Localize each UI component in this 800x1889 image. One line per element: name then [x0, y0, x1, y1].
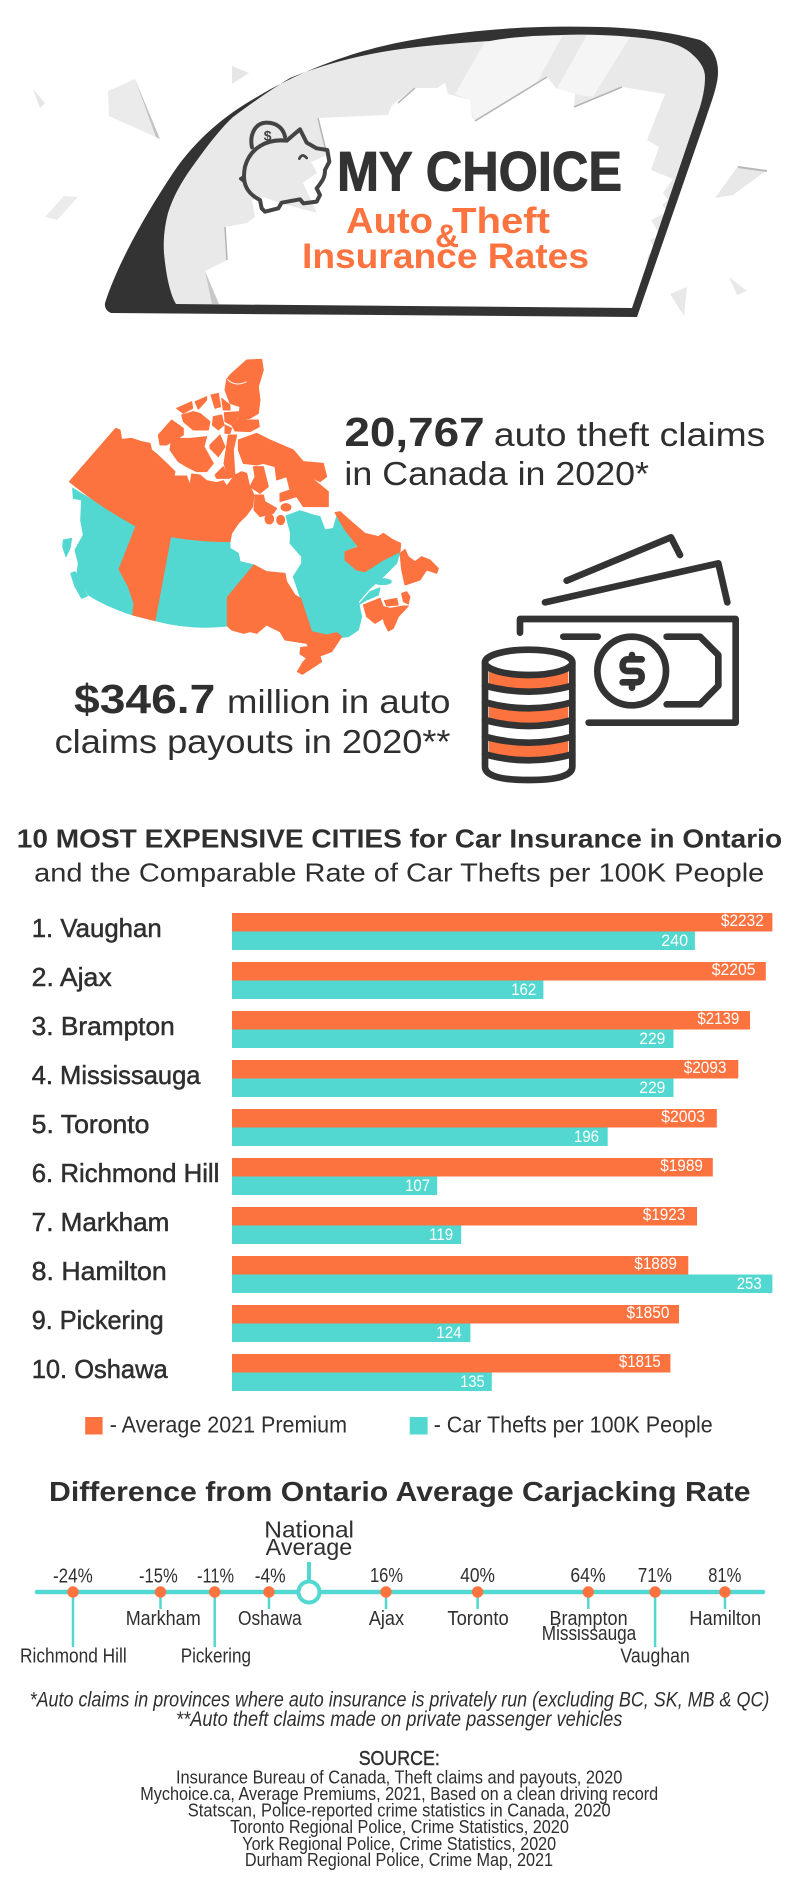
row: Toronto: 196	[574, 1128, 599, 1146]
stat: claims payouts: claims payouts in 2020**	[55, 723, 451, 760]
source list: Mychoice.ca, Average Premiums, 2021, Based on a clean driving record	[140, 1784, 658, 1804]
point: Toronto: Toronto	[447, 1608, 509, 1630]
title line two: Insurance Rates	[302, 237, 589, 276]
point: Markham: Markham	[126, 1608, 201, 1630]
lighter glass strips	[455, 35, 630, 120]
point: Pickering: Pickering	[181, 1646, 251, 1668]
row: Brampton: 3. Brampton	[32, 1011, 175, 1041]
timeline heading: Difference from Ontario Average Carjacking Rate	[49, 1476, 750, 1507]
row: Mississauga: 229	[639, 1079, 665, 1097]
row: Richmond Hill: 107	[405, 1177, 430, 1195]
Ellesmere inlet	[227, 379, 247, 384]
stat: theft claims: auto theft claims	[494, 416, 765, 453]
row: Richmond Hill	[32, 1157, 713, 1195]
logo wordmark: MY CHOICE	[337, 140, 622, 202]
point: Markham: -15%	[139, 1566, 178, 1588]
icon: banknotes and coin stack	[485, 537, 736, 780]
point: Markham	[126, 1566, 201, 1630]
title line one: theft: Theft	[452, 200, 550, 241]
bar chart heading	[17, 824, 782, 887]
timeline axis and stems	[37, 1562, 763, 1647]
window frame	[105, 27, 718, 317]
stat: claims payouts: million in auto	[227, 683, 450, 720]
national average marker: Average	[266, 1534, 352, 1560]
row: Oshawa	[32, 1353, 670, 1391]
stat: theft claims: 20,767	[344, 409, 485, 455]
national average marker	[264, 1517, 354, 1602]
row: Oshawa: 135	[460, 1373, 485, 1391]
point: Richmond Hill: -24%	[53, 1566, 93, 1588]
icon: piggy bank with coin: $	[264, 127, 272, 143]
header: car window with title	[33, 27, 767, 317]
stat: claims payouts: $346.7	[74, 676, 215, 722]
point: Oshawa	[238, 1566, 302, 1630]
chart legend: - Car Thefts per 100K People	[434, 1412, 713, 1438]
row: Ajax: 2. Ajax	[32, 962, 112, 992]
bar chart heading: and the Comparable Rate of Car Thefts per 100K People	[34, 857, 764, 887]
row: Mississauga	[32, 1059, 738, 1097]
point: Brampton and Mississauga	[542, 1565, 637, 1645]
map of Canada	[63, 359, 438, 674]
row: Markham	[32, 1206, 697, 1244]
banknotes	[520, 537, 736, 723]
broken glass opening	[205, 77, 673, 312]
point: Vaughan	[620, 1565, 690, 1668]
orange provinces and territories	[69, 359, 438, 674]
row: Markham: 7. Markham	[32, 1207, 169, 1237]
row: Vaughan: 1. Vaughan	[32, 913, 162, 943]
source list: Statscan, Police-reported crime statistics in Canada, 2020	[188, 1800, 611, 1820]
row: Mississauga: $2093	[684, 1059, 726, 1077]
stat: theft claims	[344, 409, 765, 492]
row: Markham: 119	[429, 1226, 453, 1244]
source list	[140, 1748, 658, 1870]
row: Hamilton: 8. Hamilton	[32, 1256, 167, 1286]
icon: piggy bank with coin	[241, 123, 329, 212]
row: Toronto: 5. Toronto	[32, 1109, 150, 1139]
point: Brampton and Mississauga: Brampton	[550, 1608, 628, 1630]
point: Ajax: 16%	[370, 1565, 403, 1587]
cracked glass	[164, 35, 705, 308]
stat: claims payouts	[55, 676, 451, 760]
title ampersand: &	[435, 218, 459, 254]
point: Hamilton: Hamilton	[689, 1608, 761, 1630]
point: Vaughan: 71%	[638, 1565, 672, 1587]
row: Pickering	[32, 1304, 679, 1342]
flying glass shards	[33, 66, 767, 316]
point: Oshawa: Oshawa	[238, 1608, 302, 1630]
point: Richmond Hill	[20, 1566, 127, 1668]
footnotes	[30, 1689, 769, 1731]
bar chart: premiums and thefts by city	[32, 912, 772, 1391]
point: Brampton and Mississauga: 64%	[570, 1565, 606, 1587]
title line one: auto: Auto	[346, 200, 433, 241]
national average marker: National	[264, 1517, 354, 1543]
row: Toronto	[32, 1108, 717, 1146]
chart legend	[85, 1412, 713, 1438]
source list: Durham Regional Police, Crime Map, 2021	[245, 1850, 553, 1870]
bar chart heading: 10 MOST EXPENSIVE CITIES for Car Insurance in Ontario	[17, 824, 782, 854]
row: Brampton: $2139	[697, 1010, 739, 1028]
coin stack	[485, 650, 572, 780]
row: Vaughan	[32, 912, 772, 950]
point: Vaughan: Vaughan	[620, 1646, 690, 1668]
row: Ajax: 162	[511, 981, 536, 999]
row: Ajax	[32, 961, 766, 999]
row: Vaughan: 240	[661, 932, 688, 950]
row: Oshawa: $1815	[619, 1353, 661, 1371]
point: Hamilton	[689, 1565, 761, 1630]
glass crack shadows	[205, 77, 622, 304]
source list: SOURCE:	[359, 1748, 440, 1770]
source list: York Regional Police, Crime Statistics, 2020	[242, 1834, 556, 1854]
point: Ajax	[369, 1565, 404, 1630]
point: Pickering: -11%	[197, 1566, 234, 1588]
point: Toronto	[447, 1565, 509, 1630]
row: Hamilton: 253	[737, 1275, 762, 1293]
row: Oshawa: 10. Oshawa	[32, 1354, 168, 1384]
row: Brampton: 229	[639, 1030, 665, 1048]
point: Richmond Hill: Richmond Hill	[20, 1646, 127, 1668]
point: Toronto: 40%	[460, 1565, 495, 1587]
source list: Toronto Regional Police, Crime Statistics, 2020	[230, 1817, 569, 1837]
teal provinces	[63, 488, 400, 637]
source list: Insurance Bureau of Canada, Theft claims and payouts, 2020	[176, 1767, 622, 1787]
point: Hamilton: 81%	[708, 1565, 741, 1587]
row: Mississauga: 4. Mississauga	[32, 1060, 201, 1090]
row: Markham: $1923	[643, 1206, 685, 1224]
footnotes: **Auto theft claims made on private passenger vehicles	[176, 1708, 623, 1731]
row: Ajax: $2205	[712, 961, 756, 979]
row: Richmond Hill: $1989	[660, 1157, 703, 1175]
row: Pickering: 124	[436, 1324, 462, 1342]
chart legend: - Average 2021 Premium	[110, 1412, 347, 1438]
row: Pickering: 9. Pickering	[32, 1305, 164, 1335]
row: Richmond Hill: 6. Richmond Hill	[32, 1158, 219, 1188]
row: Pickering: $1850	[626, 1304, 669, 1322]
row: Hamilton	[32, 1255, 772, 1293]
point: Ajax: Ajax	[369, 1608, 404, 1630]
row: Toronto: $2003	[661, 1108, 705, 1126]
stat: theft claims: in Canada in 2020*	[344, 455, 649, 492]
row: Hamilton: $1889	[634, 1255, 677, 1273]
row: Brampton	[32, 1010, 750, 1048]
row: Vaughan: $2232	[721, 912, 764, 930]
point: Oshawa: -4%	[255, 1566, 286, 1588]
timeline: difference from average	[20, 1517, 763, 1668]
point: Pickering	[181, 1566, 251, 1668]
point: Brampton and Mississauga: Mississauga	[542, 1623, 637, 1645]
